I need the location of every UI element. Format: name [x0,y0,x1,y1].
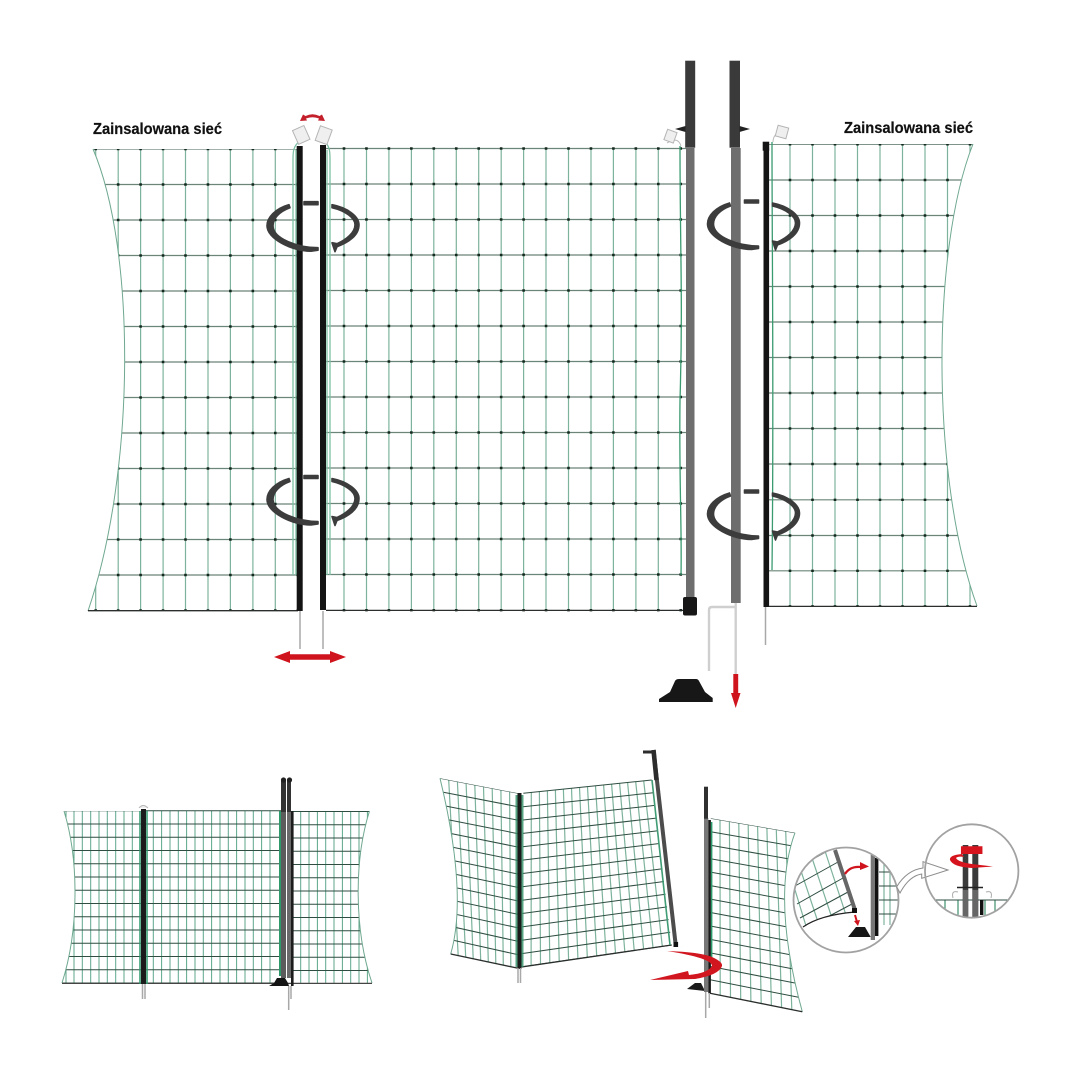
bottom centre: opened gate right net [710,818,802,1012]
main diagram: right net panel [768,144,980,607]
icon: red swirl arrow [650,951,722,980]
main diagram: middle net panel [326,148,686,610]
icon: rotation arrow top left [267,202,359,252]
detail circle: lifting the pole [790,848,900,960]
callout arrow between circles [897,862,948,893]
main diagram: left net panel [88,149,298,611]
bottom centre: opened gate poles [516,750,678,983]
heading: left installed net: Zainsalowana sieć [93,121,222,138]
gate pole two with handle and spike [709,61,750,674]
icon: small black base by gate [687,983,705,991]
icon: rotation arrow bottom right [708,490,800,540]
bottom centre: gate closing poles [704,787,712,1018]
right black pole with clip and wire [763,125,789,645]
icon: red down arrow [731,674,740,708]
bottom centre: opened gate left net [440,778,518,968]
icon: rotation arrow bottom left [267,476,359,526]
thumbnail: closed gate fence [60,777,375,1010]
icon: red double arrow [274,651,346,663]
detail circle: locking the pole tops [925,824,1018,920]
heading: right installed net: Zainsalowana sieć [844,120,973,137]
icon: black base [659,679,713,702]
icon: rotation arrow top right [708,200,800,250]
gate pole one with handle [664,61,697,615]
icon: red swing arrow above clips [300,114,325,121]
bottom centre: opened gate middle net [522,780,672,967]
left pole pair with clips and wires [292,126,332,649]
